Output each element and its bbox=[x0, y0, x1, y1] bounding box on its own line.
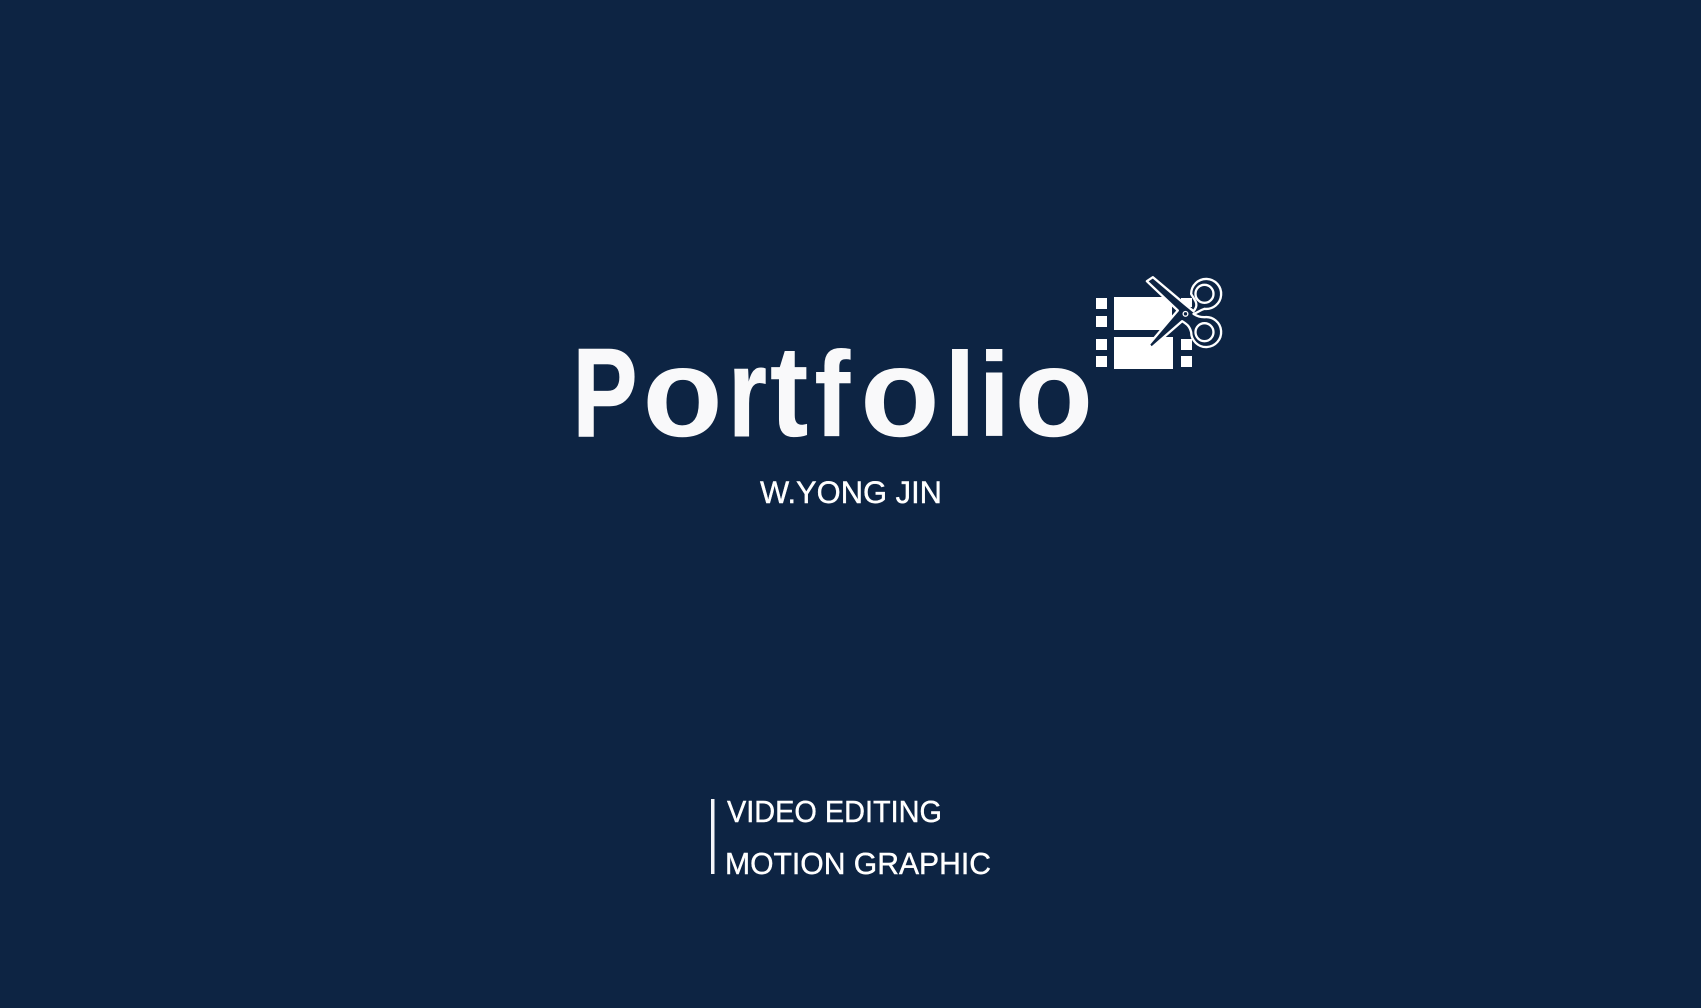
title: o bbox=[860, 323, 940, 464]
vertical divider bar bbox=[711, 799, 714, 874]
skill: video editing: VIDEO EDITING bbox=[727, 795, 942, 829]
title: i bbox=[978, 328, 1011, 462]
icon: film strip with scissors bbox=[1096, 277, 1221, 369]
title: o bbox=[642, 322, 723, 463]
title bbox=[573, 319, 1093, 465]
title: r bbox=[728, 323, 767, 464]
title: f bbox=[814, 327, 851, 462]
title: o bbox=[1014, 322, 1093, 464]
title: l bbox=[944, 328, 976, 462]
film strip bbox=[1096, 297, 1192, 369]
title: P bbox=[573, 323, 637, 463]
author name: W.YONG JIN bbox=[760, 474, 942, 510]
skill: motion graphic: MOTION GRAPHIC bbox=[725, 847, 991, 881]
scissors bbox=[1147, 277, 1221, 348]
title: t bbox=[770, 319, 808, 465]
